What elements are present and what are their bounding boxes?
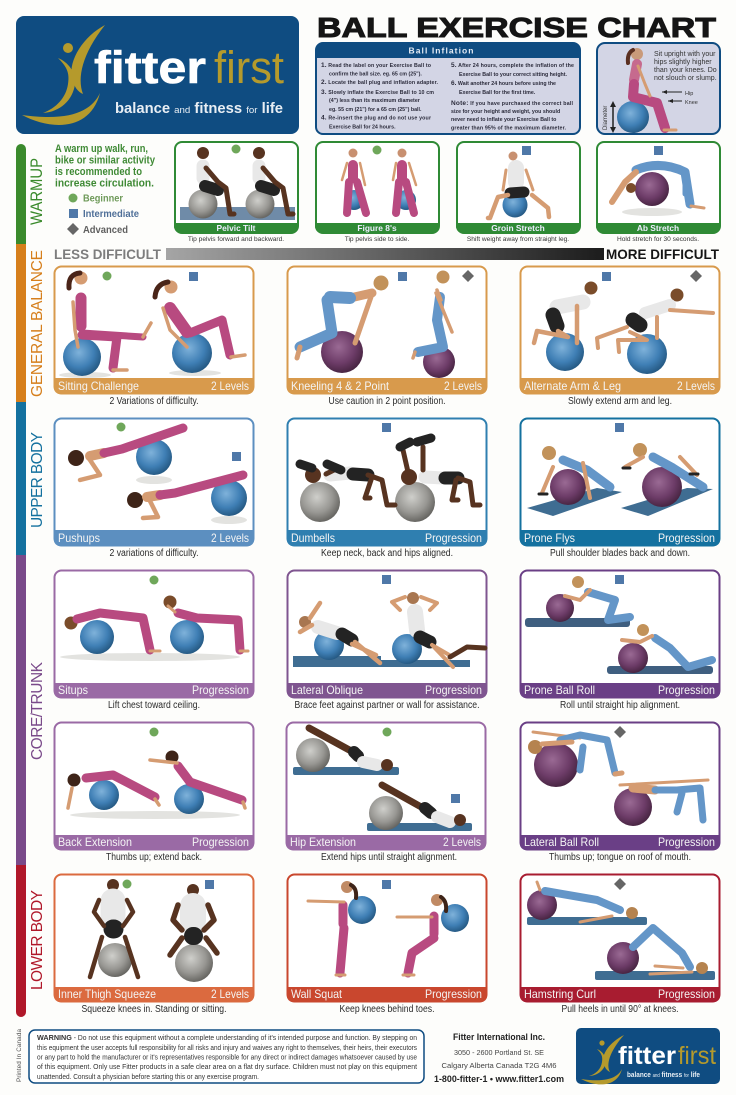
section label: lower body: LOWER BODY <box>29 890 46 990</box>
panel: ball inflation: 6. Wait another 24 hours before using the <box>451 80 556 87</box>
caption: hip extension: Extend hips until straight alignment. <box>321 852 457 863</box>
panel: correct sitting height: Knee <box>685 100 698 106</box>
panel: ball inflation: confirm the ball size. eg. 65 cm (25"). <box>329 72 422 78</box>
footer logo <box>576 1028 720 1084</box>
panel: ball inflation: Exercise Ball for 24 hours. <box>329 124 396 130</box>
caption: prone flys: Pull shoulder blades back and down. <box>550 548 690 559</box>
panel: ball inflation: 5. After 24 hours, complete the inflation of the <box>451 62 574 69</box>
panel: ball inflation: size for your height and weight, you should <box>451 109 560 115</box>
panel: pelvic tilt <box>174 142 298 243</box>
panel: sitting challenge <box>54 266 254 394</box>
panel: ball inflation: greater than 95% of the maximum diameter. <box>451 126 567 132</box>
company address: Calgary Alberta Canada T2G 4M6 <box>442 1061 556 1070</box>
panel: lateral ball roll <box>520 722 720 850</box>
label: prone ball roll <box>524 683 715 697</box>
label: kneeling: Kneeling 4 & 2 Point <box>291 379 390 393</box>
warm up note <box>55 143 155 190</box>
label: prone flys <box>524 531 715 545</box>
label: back extension: Back Extension <box>58 835 132 849</box>
section label: core/trunk: CORE/TRUNK <box>29 661 46 760</box>
caption: wall squat: Keep knees behind toes. <box>340 1004 434 1015</box>
label: dumbells <box>291 531 482 545</box>
panel: ball inflation: Exercise Ball to your correct sitting height. <box>459 72 568 78</box>
warning box: of this equipment. Only use Fitter products in a safe clear area on a flat dry surface. Children must not play on this equipment <box>37 1064 417 1071</box>
label: lateral ball roll <box>524 835 715 849</box>
label: wall squat: Progression <box>425 987 482 1001</box>
figures <box>528 732 708 826</box>
caption: situps: Lift chest toward ceiling. <box>108 700 200 711</box>
label: lateral oblique <box>291 683 482 697</box>
label: sitting challenge: 2 Levels <box>211 379 249 393</box>
figures <box>293 728 472 831</box>
label: prone ball roll: Prone Ball Roll <box>524 683 595 697</box>
panel: correct sitting height: Diameter <box>603 106 609 130</box>
label: lateral oblique: Lateral Oblique <box>291 683 363 697</box>
panel: hamstring curl <box>520 874 720 1002</box>
caption: prone ball roll: Roll until straight hip alignment. <box>560 700 680 711</box>
panel: ball inflation: eg. 55 cm (21") for a 65 cm (25") ball. <box>329 107 422 113</box>
label: hip extension: 2 Levels <box>443 835 481 849</box>
company address: 3050 - 2600 Portland St. SE <box>454 1048 544 1057</box>
legend <box>67 192 139 236</box>
label: situps: Progression <box>192 683 249 697</box>
footer logo: fitter <box>618 1042 676 1070</box>
label: sitting challenge: Sitting Challenge <box>58 379 139 393</box>
panel: groin stretch <box>456 142 580 243</box>
caption: inner thigh squeeze: Squeeze knees in. Standing or sitting. <box>82 1004 226 1015</box>
label: lateral ball roll: Lateral Ball Roll <box>524 835 599 849</box>
label: inner thigh squeeze: Inner Thigh Squeeze <box>58 987 156 1001</box>
panel: ab stretch <box>596 142 720 243</box>
panel: correct sitting height: than your knees. Do <box>654 67 717 74</box>
panel: back extension <box>54 722 254 850</box>
panel: ball inflation <box>316 43 580 134</box>
panel: ball inflation: 3. Slowly inflate the Exercise Ball to 10 cm <box>321 89 434 96</box>
panel: ball inflation: Note: If you have purchased the correct ball <box>451 100 574 107</box>
panel: correct sitting height <box>597 43 720 134</box>
caption: lateral oblique: Brace feet against partner or wall for assistance. <box>294 700 480 711</box>
company address: 1-800-fitter-1 • www.fitter1.com <box>434 1074 564 1085</box>
label: kneeling <box>291 379 482 393</box>
figures <box>534 282 713 374</box>
panel: ab stretch: Ab Stretch <box>637 223 679 233</box>
legend: Beginner <box>83 192 123 204</box>
panel: wall squat <box>287 874 487 1002</box>
section label: upper body: UPPER BODY <box>29 432 46 528</box>
panel: prone flys <box>520 418 720 546</box>
footer logo: balance and fitness for life <box>627 1070 700 1079</box>
figures <box>297 270 455 378</box>
figures <box>60 596 248 661</box>
caption: back extension: Thumbs up; extend back. <box>106 852 202 863</box>
panel: figure 8's: Figure 8's <box>357 223 397 233</box>
panel: figure 8's <box>315 142 439 243</box>
figures <box>68 428 247 524</box>
legend: Advanced <box>83 224 128 236</box>
warning box: or any part to hold the manufacturer or it's representatives responsible for any direct or indirect damages whatsoever caused by use <box>37 1054 417 1062</box>
caption: hamstring curl: Pull heels in until 90° at knees. <box>562 1004 678 1015</box>
logo banner <box>16 16 299 134</box>
company address: Fitter International Inc. <box>453 1032 545 1042</box>
label: prone ball roll: Progression <box>658 683 715 697</box>
panel: ball inflation: 4. Re-insert the plug and do not use your <box>321 114 431 122</box>
caption: pushups: 2 variations of difficulty. <box>110 548 198 559</box>
panel: ball inflation: 1. Read the label on your Exercise Ball to <box>321 62 432 69</box>
label: kneeling: 2 Levels <box>444 379 482 393</box>
panel: ball inflation: 2. Locate the ball plug and inflation adapter. <box>321 79 439 86</box>
label: alternate arm & leg: Alternate Arm & Leg <box>524 379 621 393</box>
footer logo: first <box>678 1042 716 1070</box>
section label: general balance: GENERAL BALANCE <box>29 250 46 397</box>
panel: hip extension <box>286 722 486 850</box>
label: pushups: 2 Levels <box>211 531 249 545</box>
logo banner: first <box>214 42 284 93</box>
panel: pushups <box>54 418 254 546</box>
caption: alternate: Slowly extend arm and leg. <box>568 396 672 407</box>
figures <box>59 272 245 378</box>
caption: lateral ball roll: Thumbs up; tongue on roof of mouth. <box>549 852 691 863</box>
label: wall squat: Wall Squat <box>291 987 343 1001</box>
panel: figure 8's: Tip pelvis side to side. <box>345 236 409 243</box>
warm up note: A warm up walk, run, <box>55 143 148 155</box>
panel: pelvic tilt: Pelvic Tilt <box>217 223 256 233</box>
panel: correct sitting height: Hip <box>685 91 693 97</box>
panel: alternate arm & leg <box>520 266 720 394</box>
figures <box>525 576 713 674</box>
label: inner thigh squeeze <box>58 987 249 1001</box>
company address <box>434 1032 564 1085</box>
section label: warmup: WARMUP <box>28 158 46 225</box>
label: lateral oblique: Progression <box>425 683 482 697</box>
printed in canada: Printed In Canada <box>16 1029 23 1082</box>
caption: kneeling: Use caution in 2 point position. <box>328 396 446 407</box>
logo banner: fitter <box>94 42 206 93</box>
panel: correct sitting height: hips slightly higher <box>654 59 712 66</box>
label: wall squat <box>291 987 482 1001</box>
label: hip extension: Hip Extension <box>290 835 356 849</box>
figures <box>293 592 485 667</box>
legend: Intermediate <box>83 208 139 220</box>
figures <box>527 443 713 516</box>
warning box: this equipment the user accepts full responsibility for all risks and injury and waives any right to themselves, their heirs, their executors <box>37 1045 417 1052</box>
panel: ball inflation: Ball Inflation <box>408 46 474 56</box>
warning box: unattended. Consult a physician before starting this or any exercise program. <box>37 1074 259 1081</box>
warm up note: is recommended to <box>55 166 142 178</box>
panel: groin stretch: Groin Stretch <box>491 223 545 233</box>
less difficult label: LESS DIFFICULT <box>54 246 161 262</box>
more difficult label: MORE DIFFICULT <box>606 246 719 262</box>
label: sitting challenge <box>58 379 249 393</box>
warm up note: bike or similar activity <box>55 154 155 166</box>
label: hamstring curl: Hamstring Curl <box>524 987 596 1001</box>
logo banner: balance and fitness for life <box>115 101 283 117</box>
warning box: WARNING - Do not use this equipment without a complete understanding of it's intended purpose and function. By stepping on <box>37 1033 417 1042</box>
panel: situps <box>54 570 254 698</box>
panel: correct sitting height: not slouch or slump. <box>654 75 717 82</box>
label: alternate arm & leg: 2 Levels <box>677 379 715 393</box>
label: inner thigh squeeze: 2 Levels <box>211 987 249 1001</box>
figures <box>527 882 715 980</box>
figures <box>90 879 217 982</box>
panel: pelvic tilt: Tip pelvis forward and backward. <box>188 236 284 243</box>
label: hamstring curl: Progression <box>658 987 715 1001</box>
label: back extension: Progression <box>192 835 249 849</box>
caption: dumbells: Keep neck, back and hips aligned. <box>321 548 453 559</box>
label: hamstring curl <box>524 987 715 1001</box>
panel: groin stretch: Shift weight away from straight leg. <box>467 236 569 243</box>
panel: ball inflation: never need to inflate your Exercise Ball to <box>451 117 557 123</box>
label: back extension <box>58 835 249 849</box>
label: hip extension <box>290 835 481 849</box>
figures <box>308 881 469 975</box>
title: BALL EXERCISE CHART <box>317 12 716 43</box>
figures <box>68 750 245 819</box>
panel: kneeling 4 & 2 point <box>287 266 487 394</box>
label: pushups: Pushups <box>58 531 100 545</box>
label: dumbells: Progression <box>425 531 482 545</box>
panel: correct sitting height: Sit upright with your <box>654 51 716 58</box>
difficulty gradient arrow <box>166 248 604 260</box>
figures <box>300 438 480 522</box>
panel: lateral oblique <box>287 570 487 698</box>
label: alternate arm & leg <box>524 379 715 393</box>
label: prone flys: Prone Flys <box>524 531 575 545</box>
caption: sitting challenge: 2 Variations of difficulty. <box>110 396 198 407</box>
panel: ab stretch: Hold stretch for 30 seconds. <box>617 236 699 243</box>
panel: ball inflation: (4") less than its maximum diameter <box>329 98 420 104</box>
panel: prone ball roll <box>520 570 720 698</box>
warning box <box>29 1030 424 1083</box>
label: dumbells: Dumbells <box>291 531 335 545</box>
panel: inner thigh squeeze <box>54 874 254 1002</box>
panel: ball inflation: Exercise Ball for the first time. <box>459 90 536 96</box>
label: lateral ball roll: Progression <box>658 835 715 849</box>
section colour bar <box>16 144 26 1017</box>
label: situps <box>58 683 249 697</box>
label: pushups <box>58 531 249 545</box>
panel: dumbells <box>287 418 487 546</box>
label: situps: Situps <box>58 683 88 697</box>
warm up note: increase circulation. <box>55 178 154 190</box>
label: prone flys: Progression <box>658 531 715 545</box>
